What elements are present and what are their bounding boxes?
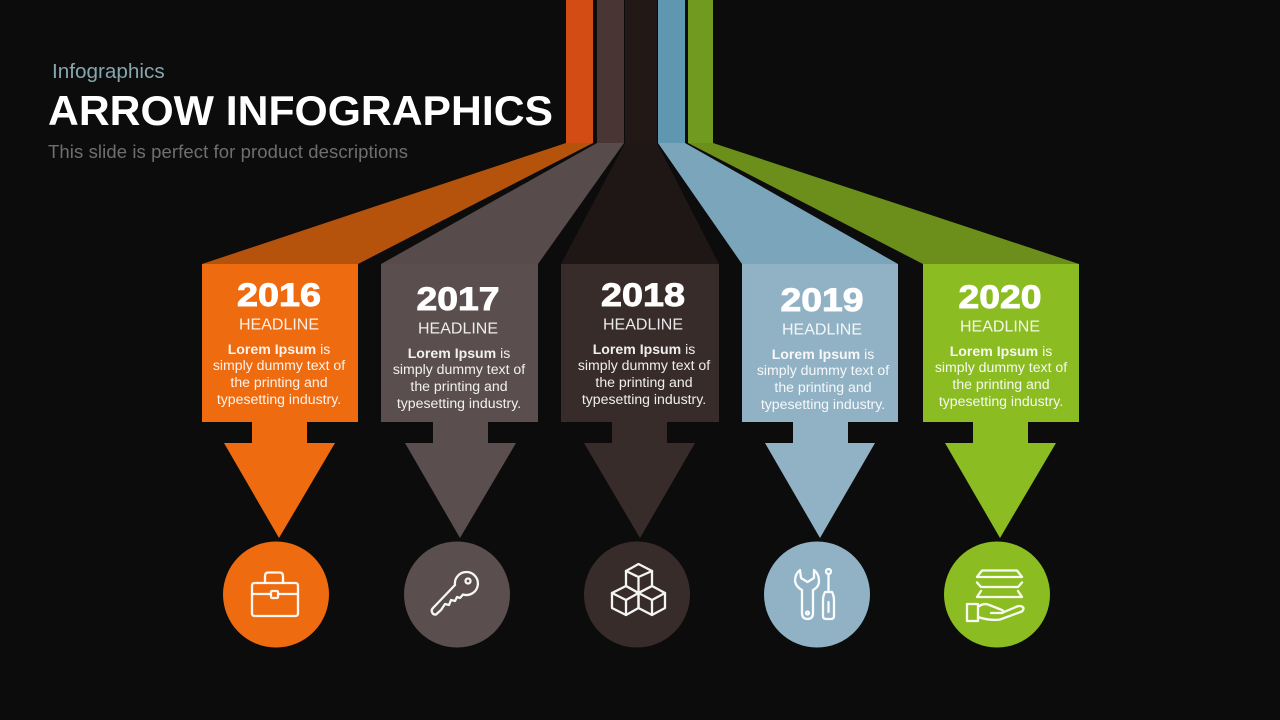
vertical strip: dark	[625, 0, 657, 143]
panel: 2019 blue arrow	[658, 0, 898, 648]
text box: 2020: typesetting industry.	[939, 393, 1063, 409]
text box: 2019: 2019	[780, 282, 864, 318]
vertical strip: green	[688, 0, 713, 143]
down arrow: green	[945, 422, 1056, 538]
text box: 2016	[202, 264, 358, 422]
text box: 2018	[561, 264, 719, 422]
down arrow: orange	[224, 422, 335, 538]
text box: 2017: the printing and	[410, 378, 508, 394]
perspective band: dark	[561, 143, 719, 264]
text box: 2016: Lorem Ipsum is	[228, 341, 330, 357]
text box: 2020: the printing and	[952, 376, 1050, 392]
text box: 2017	[381, 264, 538, 422]
perspective band: orange	[202, 143, 593, 264]
text box: 2019: simply dummy text of	[757, 362, 889, 378]
icon: cubes	[584, 542, 690, 648]
text box: 2019: Lorem Ipsum is	[772, 346, 874, 362]
panel: 2020 green arrow	[688, 0, 1079, 648]
text box: 2017: 2017	[416, 281, 500, 317]
text box: 2019: the printing and	[774, 379, 872, 395]
text box: 2020: HEADLINE	[960, 318, 1040, 336]
text box: 2017: Lorem Ipsum is	[408, 345, 510, 361]
perspective band: blue	[658, 143, 898, 264]
icon: key	[404, 542, 510, 648]
text box: 2016: simply dummy text of	[213, 357, 345, 373]
text box: 2018: simply dummy text of	[578, 357, 710, 373]
description text: This slide is perfect for product descriptions	[48, 141, 408, 162]
text box: 2016: HEADLINE	[239, 316, 319, 334]
text box: 2019	[742, 264, 898, 422]
text box: 2020: Lorem Ipsum is	[950, 343, 1052, 359]
vertical strip: blue	[658, 0, 685, 143]
text box: 2018: 2018	[601, 277, 685, 313]
text box: 2018: Lorem Ipsum is	[593, 341, 695, 357]
vertical strip: orange	[566, 0, 593, 143]
icon: wrench and screwdriver	[764, 542, 870, 648]
vertical strip: brown	[597, 0, 624, 143]
text box: 2019: HEADLINE	[782, 322, 862, 338]
text box: 2017: HEADLINE	[418, 320, 498, 338]
icon: layers on a hand	[944, 542, 1050, 648]
text box: 2018: typesetting industry.	[582, 391, 706, 407]
text box: 2020: simply dummy text of	[935, 359, 1067, 375]
panel: 2017 brown arrow	[381, 0, 624, 648]
text box: 2019: typesetting industry.	[761, 396, 885, 412]
perspective band: brown	[381, 143, 624, 264]
subtitle label: Infographics: Infographics	[52, 60, 165, 83]
text box: 2016: 2016	[237, 277, 321, 313]
title: ARROW INFOGRAPHICS	[48, 87, 553, 134]
text box: 2017: simply dummy text of	[393, 361, 525, 377]
icon: briefcase	[223, 542, 329, 648]
text box: 2018: the printing and	[595, 374, 693, 390]
perspective band: green	[688, 143, 1079, 264]
text box: 2016: the printing and	[230, 374, 328, 390]
down arrow: blue	[765, 422, 875, 538]
text box: 2020: 2020	[958, 279, 1042, 315]
text box: 2020	[923, 264, 1079, 422]
panel: 2016 orange arrow	[202, 0, 593, 648]
panel: 2018 dark arrow	[561, 0, 719, 648]
text box: 2017: typesetting industry.	[397, 395, 521, 411]
text box: 2018: HEADLINE	[603, 316, 683, 334]
down arrow: brown	[405, 422, 516, 538]
text box: 2016: typesetting industry.	[217, 391, 341, 407]
down arrow: dark	[584, 422, 695, 538]
